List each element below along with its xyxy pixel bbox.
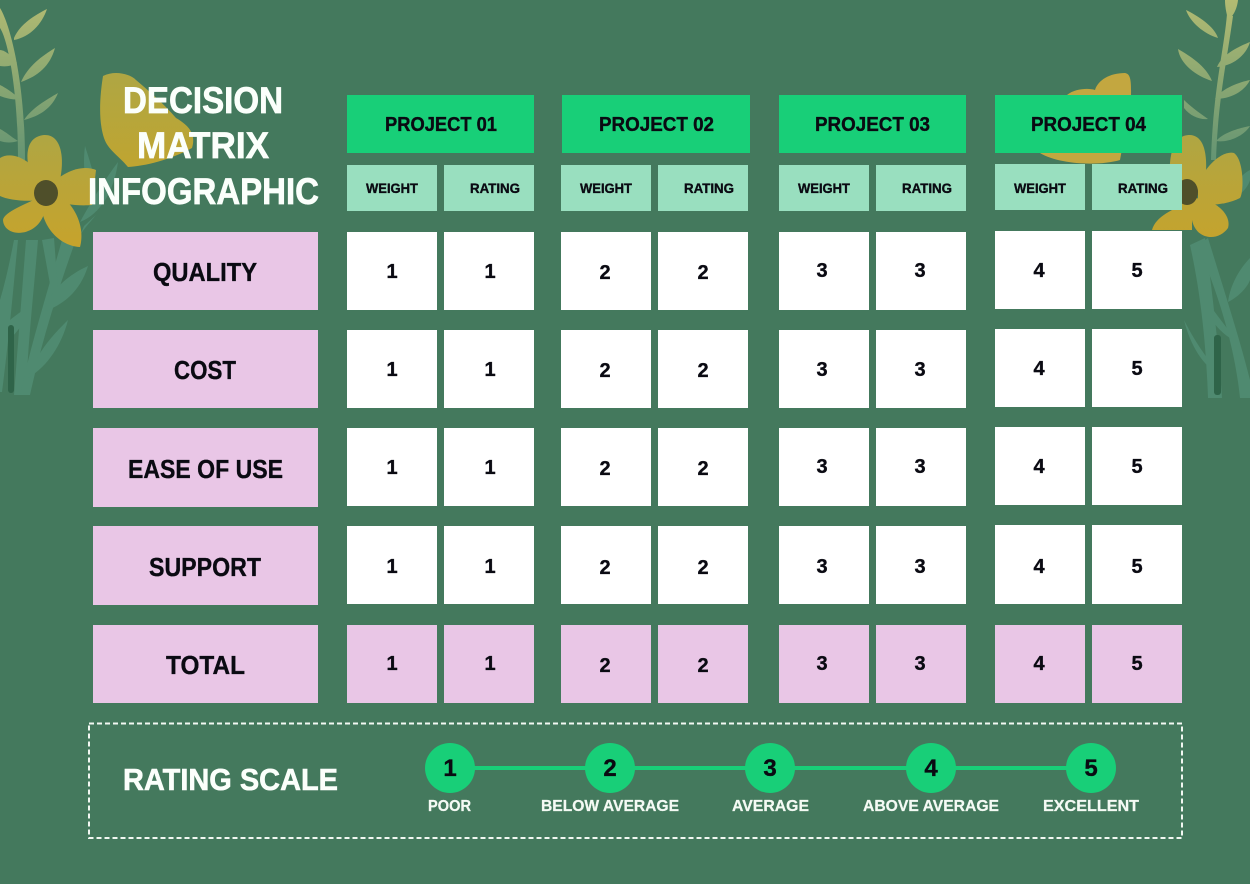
- project 01 header: [347, 95, 534, 153]
- ease of use scores: 2: [599, 458, 611, 480]
- title: MATRIX: [137, 125, 269, 166]
- scale step 4: ABOVE AVERAGE: [863, 798, 999, 815]
- quality scores: 3: [816, 260, 828, 282]
- project 04 header: PROJECT 04: [1031, 114, 1147, 136]
- scale step 4: 4: [924, 755, 938, 782]
- scale step 2: [541, 743, 679, 815]
- project headers: [347, 95, 1182, 153]
- project 02 rating: [658, 165, 748, 211]
- row: cost: [93, 329, 1182, 408]
- total scores: 3: [816, 653, 828, 675]
- project 02 header: PROJECT 02: [599, 114, 714, 136]
- label: quality: [93, 232, 318, 310]
- project 03 weight: WEIGHT: [798, 180, 850, 196]
- scale step 1: POOR: [428, 798, 471, 815]
- cost scores: 4: [1033, 358, 1045, 380]
- cost scores: 3: [816, 359, 828, 381]
- project 04 weight: WEIGHT: [1014, 180, 1066, 196]
- support scores: 2: [697, 557, 709, 579]
- title: INFOGRAPHIC: [88, 171, 319, 212]
- label: total: [93, 625, 318, 703]
- left flower centre: [34, 180, 58, 206]
- quality scores: 2: [697, 262, 709, 284]
- project 04 rating: RATING: [1118, 180, 1168, 196]
- project 03 header: PROJECT 03: [815, 114, 930, 136]
- support scores: 1: [484, 556, 496, 578]
- project 02 header: [562, 95, 750, 153]
- left stem and leaves: [0, 8, 58, 160]
- row: ease of use: [93, 427, 1182, 507]
- quality scores: 1: [484, 261, 496, 283]
- scale step 4: [863, 743, 999, 815]
- quality scores: 5: [1131, 260, 1143, 282]
- label: support: SUPPORT: [149, 552, 261, 582]
- title: DECISION: [123, 80, 283, 121]
- project 04 header: [995, 95, 1182, 153]
- row: total: [93, 625, 1182, 703]
- quality scores: 4: [1033, 260, 1045, 282]
- right stem and leaves: [1178, 0, 1250, 160]
- ease of use scores: 5: [1131, 456, 1143, 478]
- right flower centre: [1176, 179, 1198, 205]
- label: total: TOTAL: [166, 650, 245, 680]
- ease of use scores: 3: [914, 456, 926, 478]
- dashed frame: [89, 724, 1182, 838]
- project 01 weight: [347, 165, 437, 211]
- project 03 weight: [779, 165, 869, 211]
- cost scores: 5: [1131, 358, 1143, 380]
- project 01 rating: [444, 165, 534, 211]
- cost scores: [347, 329, 1182, 408]
- total scores: 4: [1033, 653, 1045, 675]
- ease of use scores: 1: [386, 457, 398, 479]
- scale step 2: BELOW AVERAGE: [541, 798, 679, 815]
- project 04 weight: [995, 164, 1085, 210]
- support scores: 1: [386, 556, 398, 578]
- scale step 5: 5: [1084, 755, 1098, 782]
- project 02 weight: [561, 165, 651, 211]
- quality scores: [347, 231, 1182, 310]
- cost scores: 1: [484, 359, 496, 381]
- scale step 2: 2: [603, 755, 617, 782]
- support scores: 4: [1033, 556, 1045, 578]
- label: cost: COST: [174, 355, 236, 385]
- project 03 rating: [876, 165, 966, 211]
- ease of use scores: [347, 427, 1182, 506]
- total scores: 5: [1131, 653, 1143, 675]
- scale step 3: 3: [763, 755, 777, 782]
- label: cost: [93, 330, 318, 408]
- total scores: 1: [386, 653, 398, 675]
- project 03 header: [779, 95, 966, 153]
- project 02 weight: WEIGHT: [580, 180, 632, 196]
- support scores: 5: [1131, 556, 1143, 578]
- scale step 3: AVERAGE: [732, 798, 809, 815]
- scale step 1: [425, 743, 475, 815]
- rating scale heading: RATING SCALE: [123, 762, 338, 797]
- quality scores: 3: [914, 260, 926, 282]
- row: quality: [93, 231, 1182, 310]
- scale step 5: EXCELLENT: [1043, 798, 1139, 815]
- project 01 rating: RATING: [470, 180, 520, 196]
- cost scores: 1: [386, 359, 398, 381]
- support scores: 3: [816, 556, 828, 578]
- cost scores: 3: [914, 359, 926, 381]
- ease of use scores: 2: [697, 458, 709, 480]
- ease of use scores: 3: [816, 456, 828, 478]
- decoration: right floral: [1040, 0, 1250, 398]
- scale connector line: [450, 766, 1091, 770]
- label: quality: QUALITY: [153, 257, 257, 287]
- right flower: [1152, 135, 1242, 237]
- left top petal: [100, 73, 193, 167]
- support scores: 2: [599, 557, 611, 579]
- scale step 1: 1: [443, 755, 457, 782]
- panel: rating scale: [89, 724, 1182, 838]
- support scores: [347, 525, 1182, 604]
- decoration: left floral: [0, 8, 193, 395]
- left flower: [0, 135, 96, 247]
- label: ease of use: [93, 428, 318, 507]
- total scores: 2: [599, 655, 611, 677]
- quality scores: 2: [599, 262, 611, 284]
- cost scores: 2: [697, 360, 709, 382]
- label: ease of use: EASE OF USE: [128, 454, 283, 484]
- ease of use scores: 1: [484, 457, 496, 479]
- weight and rating sub-headers: [347, 164, 1182, 211]
- left lower foliage: [0, 146, 118, 395]
- project 02 rating: RATING: [684, 180, 734, 196]
- project 04 rating: [1092, 164, 1182, 210]
- scale step 3: [732, 743, 809, 815]
- ease of use scores: 4: [1033, 456, 1045, 478]
- project 01 header: PROJECT 01: [385, 114, 497, 136]
- total scores: [347, 625, 1182, 703]
- title: [88, 80, 319, 212]
- scale step 5: [1043, 743, 1139, 815]
- support scores: 3: [914, 556, 926, 578]
- row: support: [93, 525, 1182, 605]
- cost scores: 2: [599, 360, 611, 382]
- project 01 weight: WEIGHT: [366, 180, 418, 196]
- total scores: 3: [914, 653, 926, 675]
- project 03 rating: RATING: [902, 180, 952, 196]
- total scores: 2: [697, 655, 709, 677]
- quality scores: 1: [386, 261, 398, 283]
- right back flower petals: [1040, 73, 1131, 164]
- label: support: [93, 526, 318, 605]
- total scores: 1: [484, 653, 496, 675]
- right lower foliage: [1184, 170, 1250, 398]
